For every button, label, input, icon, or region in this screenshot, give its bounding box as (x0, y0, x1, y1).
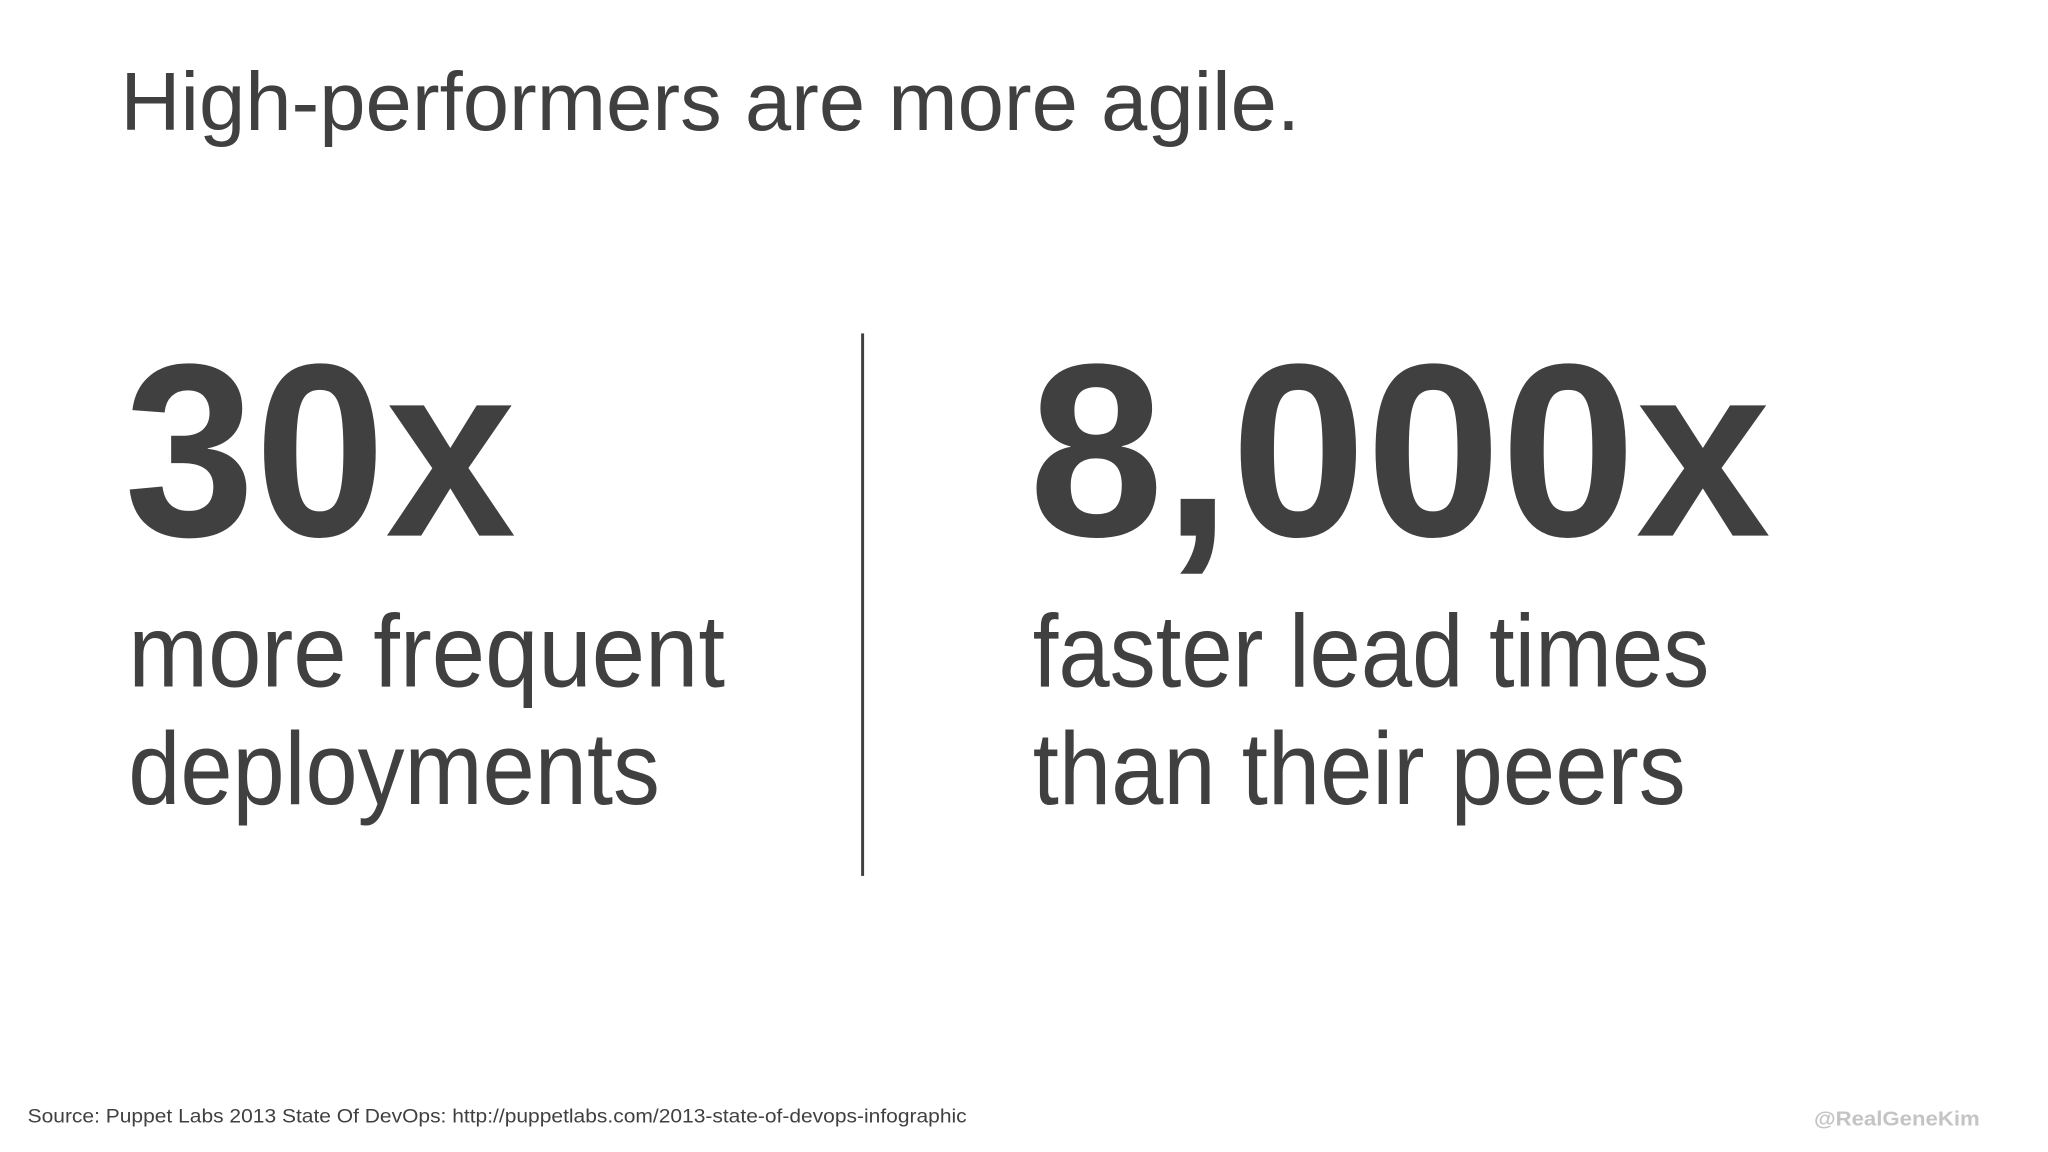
source note: Source: Puppet Labs 2013 State Of DevOps: http://puppetlabs.com/2013-state-of-devops-infographic (28, 1106, 967, 1128)
description: more frequent deployments: more frequent (128, 594, 725, 709)
big number: 30x: 30x (124, 314, 516, 589)
big number: 8,000x: 8,000x (1029, 314, 1771, 589)
title: High-performers are more agile. (120, 55, 1300, 148)
description: faster lead times than their peers (1033, 594, 1709, 826)
description: faster lead times than their peers: than their peers (1033, 711, 1686, 826)
description: more frequent deployments (128, 594, 725, 826)
author handle: @RealGeneKim (1814, 1107, 1980, 1130)
stat panel: lead times (1029, 314, 1771, 826)
divider line (861, 333, 864, 876)
description: more frequent deployments: deployments (128, 711, 660, 826)
description: faster lead times than their peers: faster lead times (1033, 594, 1709, 709)
stat panel: deployments (124, 314, 725, 826)
